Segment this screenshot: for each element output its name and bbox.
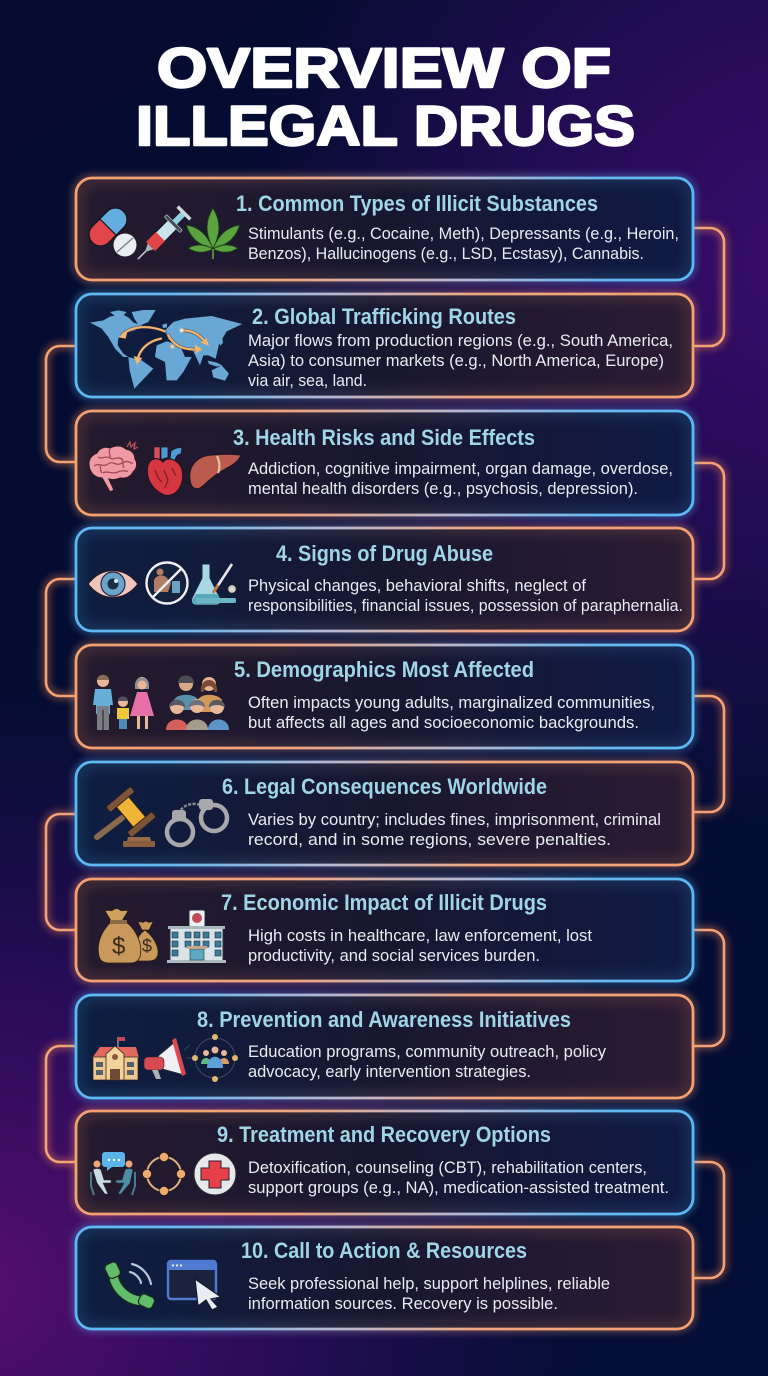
icon: cannabis leaf — [183, 208, 243, 259]
icon: capsule and pill — [84, 203, 136, 256]
body text: productivity, and social services burden. — [248, 946, 540, 965]
panel: 5 demographics — [76, 645, 693, 748]
body text: Asia) to consumer markets (e.g., North America, Europe) — [248, 351, 664, 370]
icon: money bags: $ — [112, 933, 125, 960]
heading: 8. Prevention and Awareness Initiatives — [197, 1007, 571, 1032]
body text: Benzos), Hallucinogens (e.g., LSD, Ecstasy), Cannabis. — [248, 244, 644, 263]
body text: High costs in healthcare, law enforcement, lost — [248, 926, 592, 945]
heading: 2. Global Trafficking Routes — [252, 304, 516, 329]
icon: browser with cursor — [168, 1261, 221, 1310]
icon: medical cross — [194, 1153, 236, 1195]
icon: prohibited — [146, 562, 188, 604]
body text: Education programs, community outreach, policy — [248, 1042, 606, 1061]
body text — [248, 810, 661, 849]
body text — [248, 1042, 606, 1081]
panel: 3 health risks — [76, 411, 693, 515]
body text: Often impacts young adults, marginalized communities, — [248, 693, 655, 712]
body text: mental health disorders (e.g., psychosis, depression). — [248, 479, 638, 498]
heading: 4. Signs of Drug Abuse — [276, 541, 493, 566]
body text — [248, 224, 679, 263]
body text: but affects all ages and socioeconomic backgrounds. — [248, 713, 639, 732]
heading: 1. Common Types of Illicit Substances — [236, 191, 598, 216]
icon: syringe — [130, 204, 193, 267]
icon: eye — [88, 570, 138, 598]
heading: 9. Treatment and Recovery Options — [217, 1122, 551, 1147]
panel: 6 legal — [76, 762, 693, 865]
body text: advocacy, early intervention strategies. — [248, 1062, 531, 1081]
heading: 7. Economic Impact of Illicit Drugs — [221, 890, 547, 915]
icon: gavel — [97, 786, 156, 847]
title: ILLEGAL DRUGS — [136, 94, 635, 157]
heading: 6. Legal Consequences Worldwide — [222, 774, 547, 799]
icon: hospital — [167, 910, 226, 963]
heading: 10. Call to Action & Resources — [241, 1238, 527, 1263]
icon: school — [92, 1037, 139, 1080]
panel: 4 signs of abuse — [76, 528, 693, 631]
body text — [248, 1274, 610, 1313]
body text: information sources. Recovery is possible. — [248, 1294, 558, 1313]
body text: responsibilities, financial issues, possession of paraphernalia. — [248, 596, 683, 615]
heading: 5. Demographics Most Affected — [234, 657, 534, 682]
panel: 7 economic — [76, 879, 693, 981]
icon: flask and paraphernalia — [192, 564, 236, 605]
body text — [248, 576, 683, 615]
icon: family — [93, 675, 154, 730]
icon: heart — [147, 447, 183, 495]
icon: counselling — [91, 1152, 135, 1195]
body text: Seek professional help, support helplines, reliable — [248, 1274, 610, 1293]
title: OVERVIEW OF — [157, 36, 611, 99]
icon: handcuffs — [167, 799, 227, 845]
body text: Detoxification, counseling (CBT), rehabilitation centers, — [248, 1158, 647, 1177]
connectors between panels — [46, 228, 724, 1278]
panel: 8 prevention — [76, 995, 693, 1098]
body text: Addiction, cognitive impairment, organ damage, overdose, — [248, 459, 673, 478]
icon: community group — [166, 676, 229, 730]
body text — [248, 331, 673, 390]
body text — [248, 926, 592, 965]
body text: Major flows from production regions (e.g., South America, — [248, 331, 673, 350]
icon: phone — [104, 1261, 156, 1310]
panel: 10 call to action — [76, 1227, 693, 1329]
icon: money bags: $ — [142, 936, 152, 956]
body text: Stimulants (e.g., Cocaine, Meth), Depressants (e.g., Heroin, — [248, 224, 679, 243]
icon: liver — [190, 454, 241, 489]
heading: 3. Health Risks and Side Effects — [233, 425, 535, 450]
icon: support ring — [142, 1152, 186, 1196]
body text — [248, 459, 673, 498]
icon: brain — [89, 442, 138, 492]
panel: 2 trafficking routes — [76, 294, 693, 397]
icon: money bags — [98, 908, 158, 963]
body text — [248, 1158, 669, 1197]
title — [136, 36, 635, 157]
icon: world map with routes — [90, 310, 242, 389]
panel: 9 treatment — [76, 1111, 693, 1214]
body text: support groups (e.g., NA), medication-assisted treatment. — [248, 1178, 669, 1197]
panel: 1 common types — [76, 178, 693, 280]
body text — [248, 693, 655, 732]
body text: Varies by country; includes fines, imprisonment, criminal — [248, 810, 661, 829]
body text: via air, sea, land. — [248, 371, 367, 390]
icon: community circle — [192, 1034, 238, 1082]
body text: Physical changes, behavioral shifts, neglect of — [248, 576, 586, 595]
icon: megaphone — [144, 1038, 193, 1079]
body text: record, and in some regions, severe penalties. — [248, 830, 611, 849]
